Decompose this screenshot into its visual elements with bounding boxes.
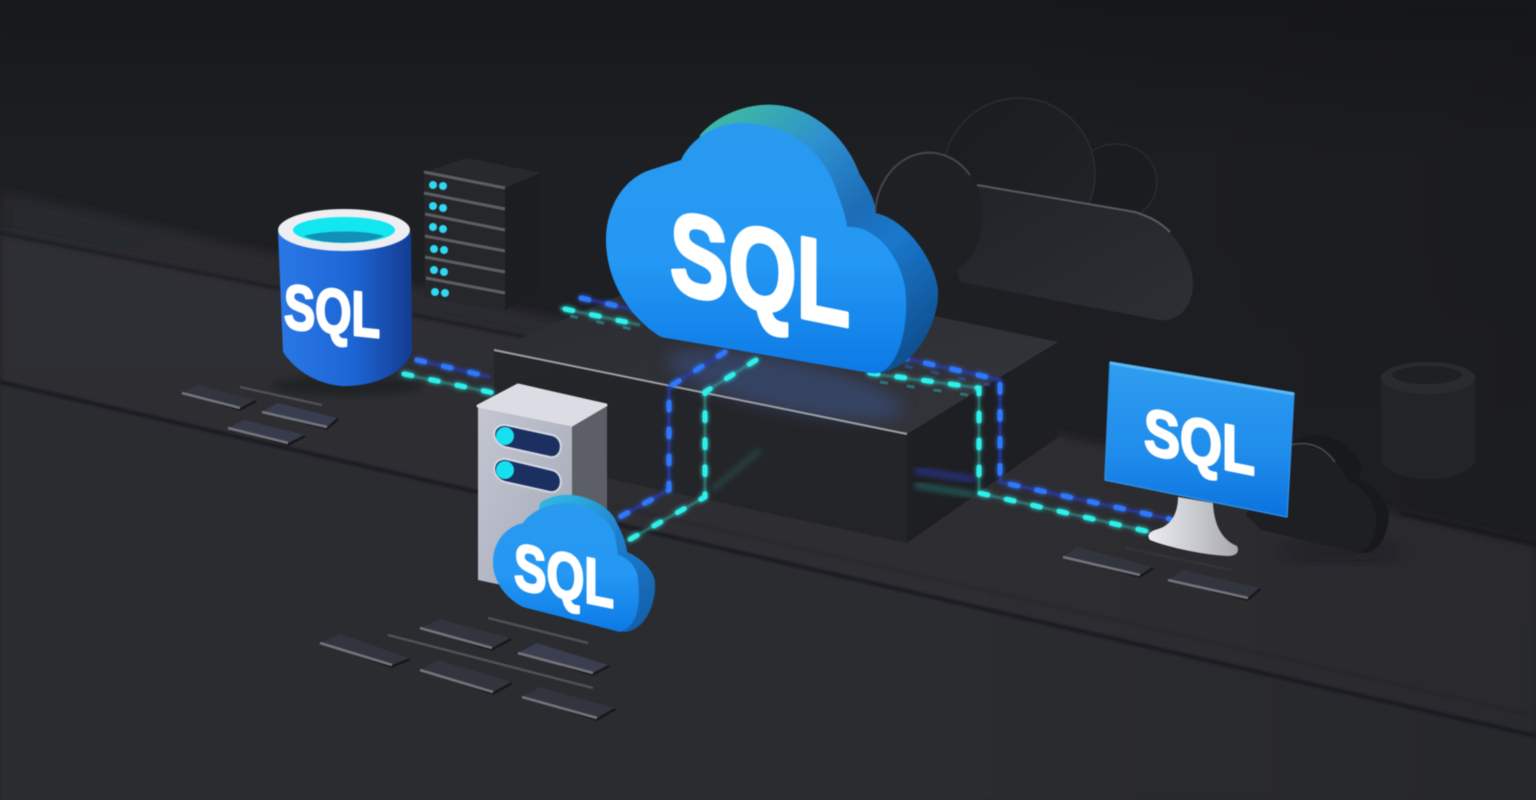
server rack indicator lights <box>429 181 449 297</box>
tile group near monitor <box>1063 547 1261 601</box>
platform box <box>494 265 1058 543</box>
back dark clouds <box>875 98 1193 320</box>
dark cloud behind monitor <box>1246 435 1400 560</box>
upper drive slot <box>494 425 561 457</box>
monitor <box>1105 362 1294 556</box>
large cloud SQL label: SQL <box>670 186 850 352</box>
tile group near small cloud <box>320 618 616 721</box>
connectors <box>402 298 1170 541</box>
cylinder SQL label: SQL <box>284 272 380 352</box>
tile group near cylinder <box>182 385 339 446</box>
white server tower <box>478 385 607 600</box>
large SQL cloud <box>606 105 938 373</box>
monitor stand <box>1148 497 1238 556</box>
monitor SQL label: SQL <box>1144 395 1255 489</box>
small cloud SQL label: SQL <box>514 530 614 622</box>
dark cylinder <box>1381 362 1475 479</box>
database cylinder <box>272 209 422 396</box>
lower drive slot <box>494 459 561 492</box>
small SQL cloud <box>493 495 655 632</box>
dark server rack <box>424 158 541 310</box>
